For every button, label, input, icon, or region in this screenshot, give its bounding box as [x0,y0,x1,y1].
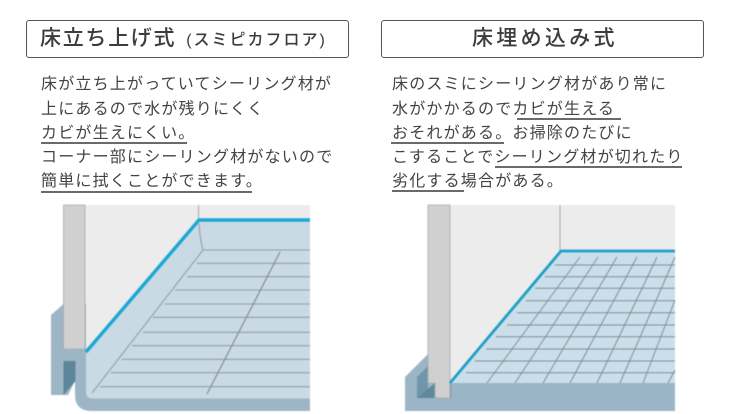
text block: left: コーナー部にシーリング材がないので [41,149,333,166]
text block: left: 上にあるので水が残りにくく [41,101,264,118]
floor surface [450,251,675,383]
channel slot [417,366,451,398]
text block: right: 水がかかるのでカビが生える [392,101,615,118]
back wall [450,205,675,383]
heading: left: 床立ち上げ式 (スミピカフロア) [40,27,327,50]
text block: right: おそれがある。お掃除のたびに [392,125,633,142]
text block: right: 劣化する場合がある。 [392,173,564,190]
wall post [64,205,85,349]
text block: left: カビが生えにくい。 [41,125,195,142]
title box: left [26,20,349,58]
back wall [85,205,310,355]
raised floor surface [86,220,310,398]
blue sealant line [86,220,310,352]
base cross-section [51,304,310,411]
floor tile lines [92,224,310,394]
text block: right: こすることでシーリング材が切れたり [392,149,684,166]
text block: left: 床が立ち上がっていてシーリング材が [41,76,332,93]
text block: right: 床のスミにシーリング材があり常に [392,76,667,93]
heading: right: 床埋め込み式 [472,27,618,50]
floor grid lines [466,257,675,383]
title box: right [381,20,704,58]
base front face [405,354,675,411]
text block: left [41,75,333,193]
wall post [428,205,450,398]
text block: left: 簡単に拭くことができます。 [41,173,263,190]
text block: right [391,75,684,192]
blue sealant line [450,251,675,383]
channel slot [64,361,76,395]
